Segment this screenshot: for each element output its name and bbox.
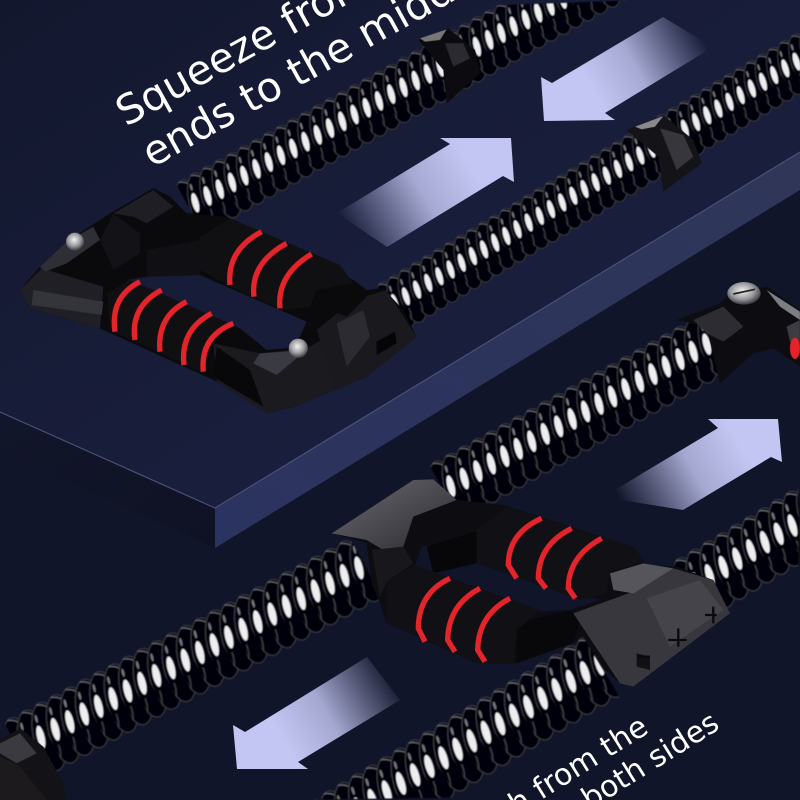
- arrow: bottom left-pointing outward: [233, 657, 400, 769]
- spring: lower handle back: [427, 309, 737, 525]
- arrow: top right-pointing inward: [337, 138, 514, 247]
- foam grip: upper handle back: [200, 218, 353, 310]
- connector: top spring sleeves: [418, 28, 702, 192]
- spring: upper handle back: [174, 0, 635, 238]
- foam grip: lower handle back: [477, 507, 645, 600]
- arrow: top left-pointing inward: [541, 17, 713, 121]
- spring: lower handle front: [305, 634, 621, 800]
- exerciser handle: upper: [20, 188, 417, 413]
- arrow: bottom right-pointing outward: [603, 419, 782, 510]
- exerciser handle: lower: [332, 479, 730, 687]
- connector: lower handle left end: [0, 728, 67, 800]
- screw: upper handle left: [66, 233, 84, 251]
- spring: upper handle front: [374, 26, 800, 335]
- screw: upper handle right: [289, 339, 308, 358]
- connector and screw: lower handle far end: [677, 282, 800, 383]
- foam grip: upper handle front: [107, 280, 233, 373]
- spring: lower handle right: [670, 481, 800, 624]
- platform slab: [0, 0, 800, 548]
- foam grip: lower handle front: [387, 565, 540, 663]
- spring: lower handle left: [2, 534, 384, 786]
